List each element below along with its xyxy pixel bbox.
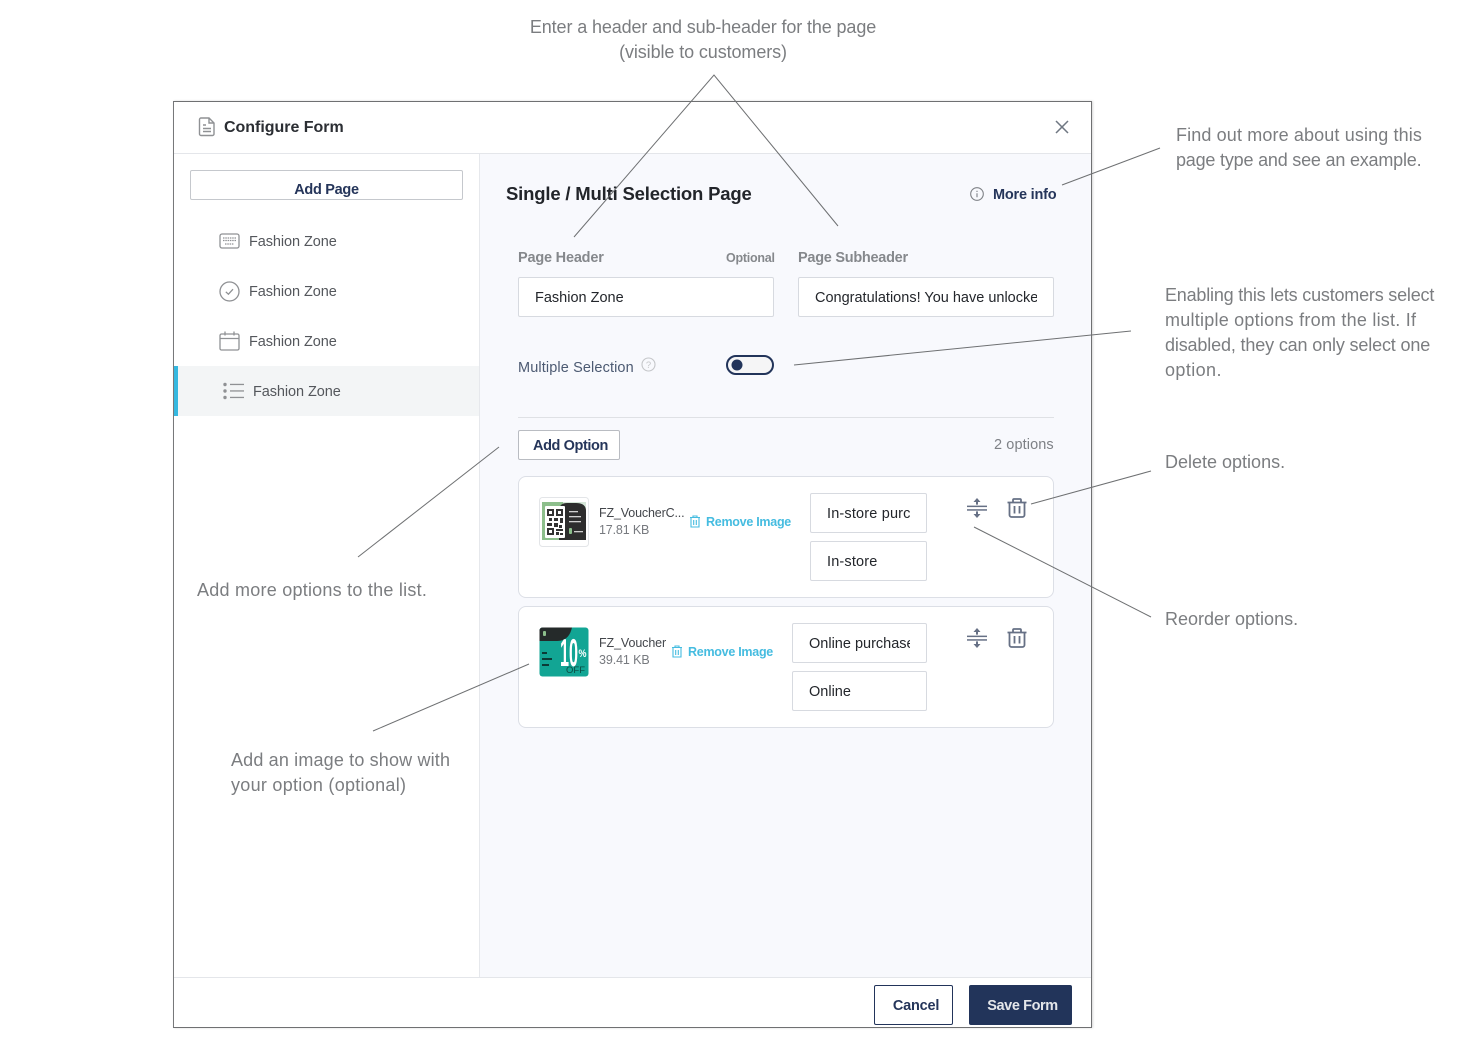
section heading: Single / Multi Selection Page (506, 183, 752, 204)
sidebar item 1: Fashion Zone (249, 234, 337, 250)
icon: document (198, 117, 215, 136)
icon: help: ? (646, 360, 651, 371)
annotation: multiple selection: option. (1165, 360, 1222, 380)
toggle: multiple selection off (726, 355, 774, 375)
input: page header (518, 277, 774, 317)
icon: remove image 2 (672, 646, 682, 658)
remove image link 1: Remove Image (706, 515, 791, 529)
annotation: reorder options: Reorder options. (1165, 609, 1298, 629)
image: voucher thumbnail 1 (539, 497, 589, 547)
label: page subheader: Page Subheader (798, 250, 908, 266)
annotation: add an image: Add an image to show with (231, 750, 450, 770)
input: option 1 label (810, 541, 927, 581)
input: option 1 title (810, 493, 927, 533)
icon: delete 1 (1008, 498, 1026, 518)
icon: reorder 2 (967, 628, 987, 648)
file name 2: FZ_Voucher (599, 636, 666, 650)
icon: info (970, 187, 984, 201)
image: voucher thumbnail 2: 10 (560, 632, 578, 675)
input: option 2 label: Online (809, 684, 851, 700)
label: page header: Page Header (518, 250, 604, 266)
button: cancel: Cancel (893, 998, 939, 1014)
button: cancel (874, 985, 953, 1025)
icon: calendar (219, 332, 240, 351)
icon: list (223, 382, 244, 400)
annotation: multiple selection: Enabling this lets customers select (1165, 285, 1434, 305)
sidebar item 2: Fashion Zone (249, 284, 337, 300)
panel: selected sidebar row (174, 366, 479, 416)
label: optional: Optional (726, 251, 775, 265)
icon: check circle (219, 281, 240, 302)
icon: delete 2 (1008, 628, 1026, 648)
annotation: more info: page type and see an example. (1176, 150, 1421, 170)
input: option 2 title (792, 623, 927, 663)
button: add option: Add Option (533, 438, 608, 454)
footer divider (174, 977, 1091, 978)
image: voucher thumbnail 2: OFF (566, 665, 586, 675)
annotation: more info (1176, 125, 1422, 170)
section divider (518, 417, 1054, 418)
icon: close (1056, 120, 1068, 134)
annotation: multiple selection: multiple options from the list. If (1165, 310, 1416, 330)
annotation: delete options: Delete options. (1165, 452, 1285, 472)
input: option 2 label (792, 671, 927, 711)
icon: reorder 1 (967, 498, 987, 518)
image: voucher thumbnail 2: % (578, 648, 587, 660)
input: option 1 label: In-store (827, 554, 878, 570)
panel: option card 2 (518, 606, 1054, 728)
annotation: add an image: your option (optional) (231, 775, 406, 795)
annotation: header and sub-header: (visible to customers) (619, 42, 787, 62)
sidebar item 3: Fashion Zone (249, 334, 337, 350)
dialog title: Configure Form (224, 119, 344, 136)
annotation: more info: Find out more about using this (1176, 125, 1422, 145)
button: add option (518, 430, 620, 460)
input: page header: Fashion Zone (535, 290, 624, 306)
sidebar item 4 (selected): Fashion Zone (253, 384, 341, 400)
panel: option card 1 (518, 476, 1054, 598)
panel: configure form dialog (173, 101, 1092, 1028)
annotation: add an image (231, 750, 450, 795)
annotation: header and sub-header: Enter a header and sub-header for the page (530, 17, 876, 37)
annotation: multiple selection (1165, 285, 1434, 380)
button: add page (190, 170, 463, 200)
remove image link 2: Remove Image (688, 645, 773, 659)
image: voucher thumbnail 2 (539, 628, 588, 676)
button: add page: Add Page (294, 182, 359, 198)
panel: page settings background (479, 154, 1091, 978)
more info link: More info (993, 187, 1056, 203)
header divider (174, 153, 1091, 154)
button: save form (969, 985, 1072, 1025)
file size 2: 39.41 KB (599, 653, 650, 667)
input: page subheader (798, 277, 1054, 317)
icon: keyboard (219, 233, 240, 249)
annotation: add more options: Add more options to the list. (197, 580, 427, 600)
annotation: header and sub-header (530, 17, 876, 62)
button: save form: Save Form (987, 998, 1058, 1014)
icon: remove image 1 (690, 516, 700, 528)
label: multiple selection: Multiple Selection (518, 360, 634, 376)
options count: 2 options (994, 437, 1054, 453)
icon: help (642, 358, 656, 372)
annotation: multiple selection: disabled, they can only select one (1165, 335, 1430, 355)
file name 1: FZ_VoucherC... (599, 506, 684, 520)
file size 1: 17.81 KB (599, 523, 649, 537)
